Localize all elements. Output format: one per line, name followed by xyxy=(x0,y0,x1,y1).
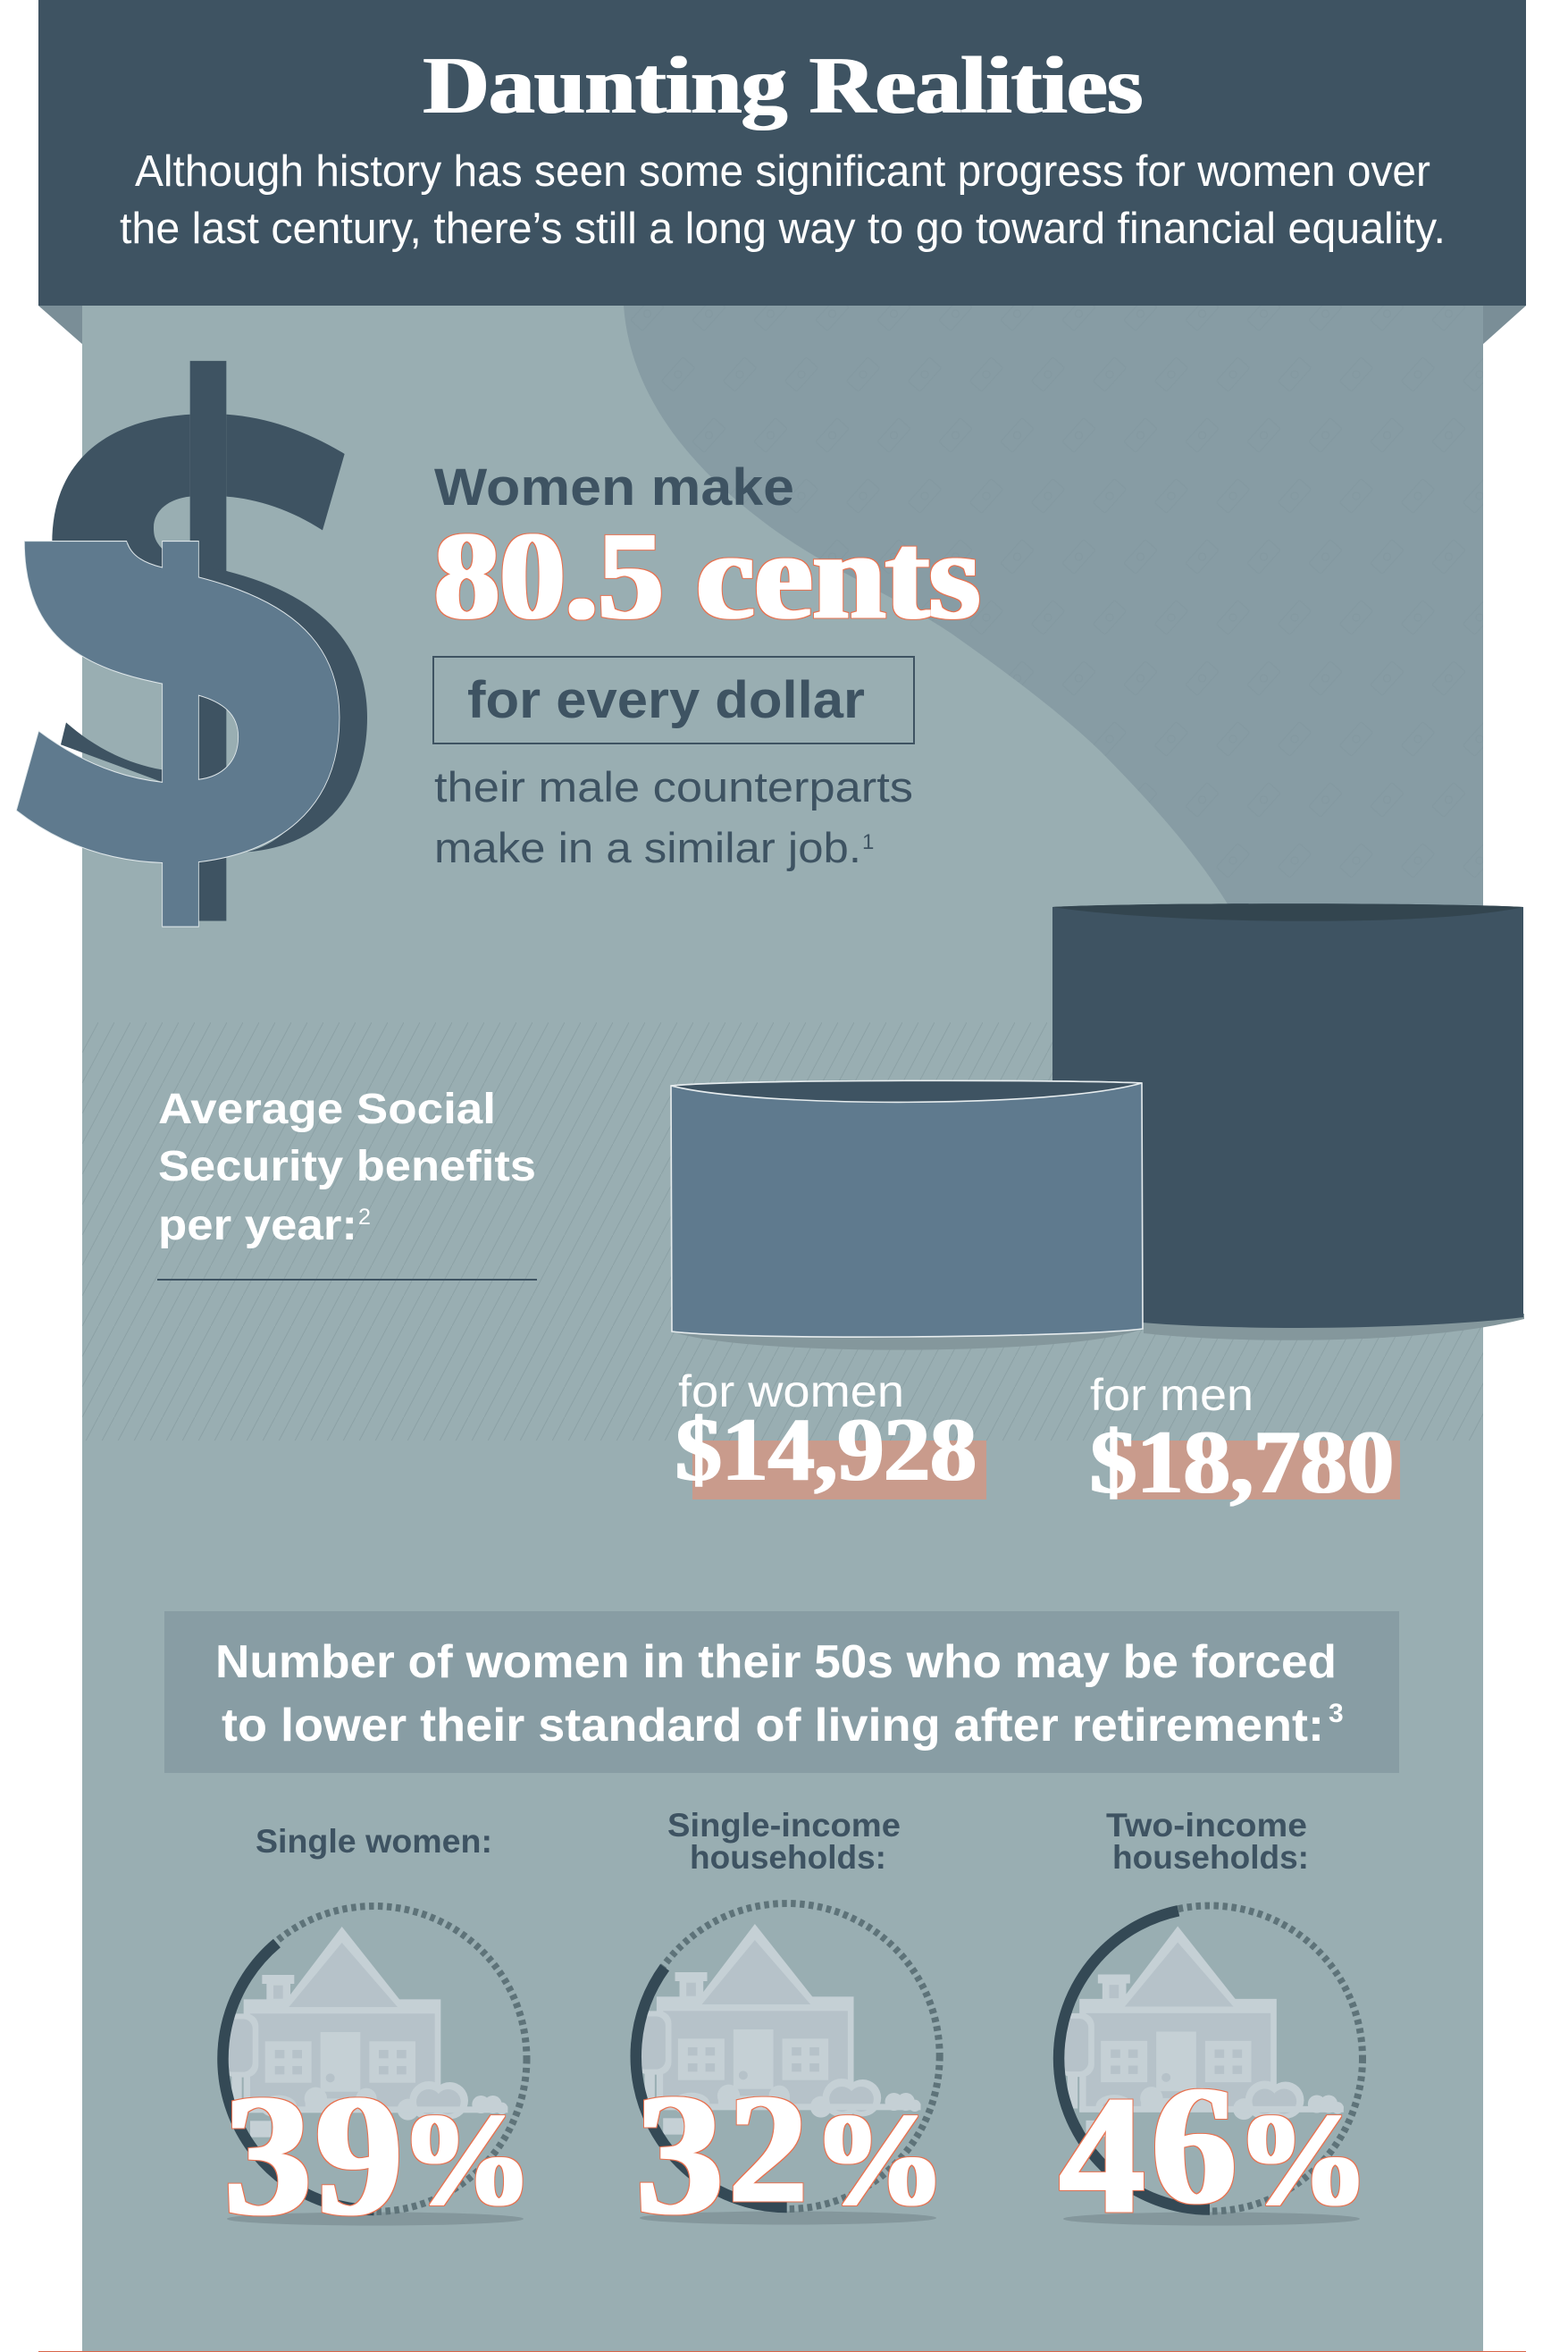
caption: 1 xyxy=(862,830,874,854)
social security heading: per year: xyxy=(158,1202,357,1249)
intro text: Although history has seen some significant progress for women over xyxy=(135,147,1430,196)
value 46%: 4 xyxy=(1060,2062,1145,2249)
decorative blob with money pattern xyxy=(624,306,1483,929)
section heading box: 3 xyxy=(1329,1699,1344,1728)
section heading box xyxy=(164,1611,1399,1773)
80.5 cents: 80.5 cents xyxy=(434,507,980,645)
for every dollar box xyxy=(433,657,914,743)
section heading box: Number of women in their 50s who may be forced xyxy=(215,1636,1337,1688)
value 39%: % xyxy=(400,2087,532,2233)
hatched band xyxy=(82,1022,1483,1441)
caption: their male counterparts xyxy=(434,763,913,811)
cylinder chart: men xyxy=(1052,903,1524,1340)
donut: 32% xyxy=(634,1903,945,2251)
icon: house xyxy=(223,1927,507,2138)
value: for men: $18,780 xyxy=(1090,1412,1394,1513)
value: for women: $14,928 xyxy=(675,1399,977,1500)
value 39%: 3 xyxy=(224,2059,311,2252)
donut: 46% xyxy=(1057,1905,1369,2249)
value 39%: 9 xyxy=(315,2059,402,2252)
value: for men: for men xyxy=(1090,1370,1254,1420)
donut: 39% xyxy=(222,1906,532,2252)
social security heading: Average Social xyxy=(158,1086,496,1133)
label: single-income households: Single-income xyxy=(667,1807,901,1844)
panel: main background xyxy=(82,306,1483,2352)
value 32%: 3 xyxy=(636,2058,724,2251)
banner fold: right xyxy=(1483,306,1526,344)
value: for men xyxy=(1090,1370,1400,1513)
women make: Women make xyxy=(434,458,794,517)
section heading box: to lower their standard of living after retirement: xyxy=(222,1700,1324,1751)
label: single-income households: households: xyxy=(690,1839,886,1876)
social security heading xyxy=(157,1086,537,1281)
icon: house xyxy=(636,1924,921,2135)
value 32%: 2 xyxy=(729,2062,808,2235)
social security heading: 2 xyxy=(358,1205,371,1230)
label: single women: Single women: xyxy=(256,1823,492,1860)
label: single-income households xyxy=(667,1807,901,1876)
caption xyxy=(434,763,913,871)
wage gap text block xyxy=(433,458,980,871)
intro text: the last century, there’s still a long way to go toward financial equality. xyxy=(120,205,1446,253)
value 32%: % xyxy=(813,2087,945,2233)
value: for women: for women xyxy=(678,1366,904,1416)
value 46%: 6 xyxy=(1152,2052,1237,2239)
social security heading: Security benefits xyxy=(158,1143,536,1190)
label: two-income households: households: xyxy=(1112,1839,1309,1876)
banner fold: left xyxy=(38,306,82,344)
label: two-income households xyxy=(1106,1807,1309,1876)
title: Daunting Realities xyxy=(423,40,1143,130)
icon: house xyxy=(1059,1926,1344,2137)
caption: make in a similar job. xyxy=(434,824,861,871)
intro text xyxy=(120,147,1446,253)
icon: dollar sign xyxy=(16,361,367,927)
for every dollar box: for every dollar xyxy=(467,671,865,729)
bottom rule xyxy=(38,2351,1526,2352)
header banner xyxy=(38,0,1526,306)
label: two-income households: Two-income xyxy=(1106,1807,1307,1844)
value 46%: % xyxy=(1237,2087,1369,2233)
cylinder chart: women xyxy=(671,1080,1143,1350)
